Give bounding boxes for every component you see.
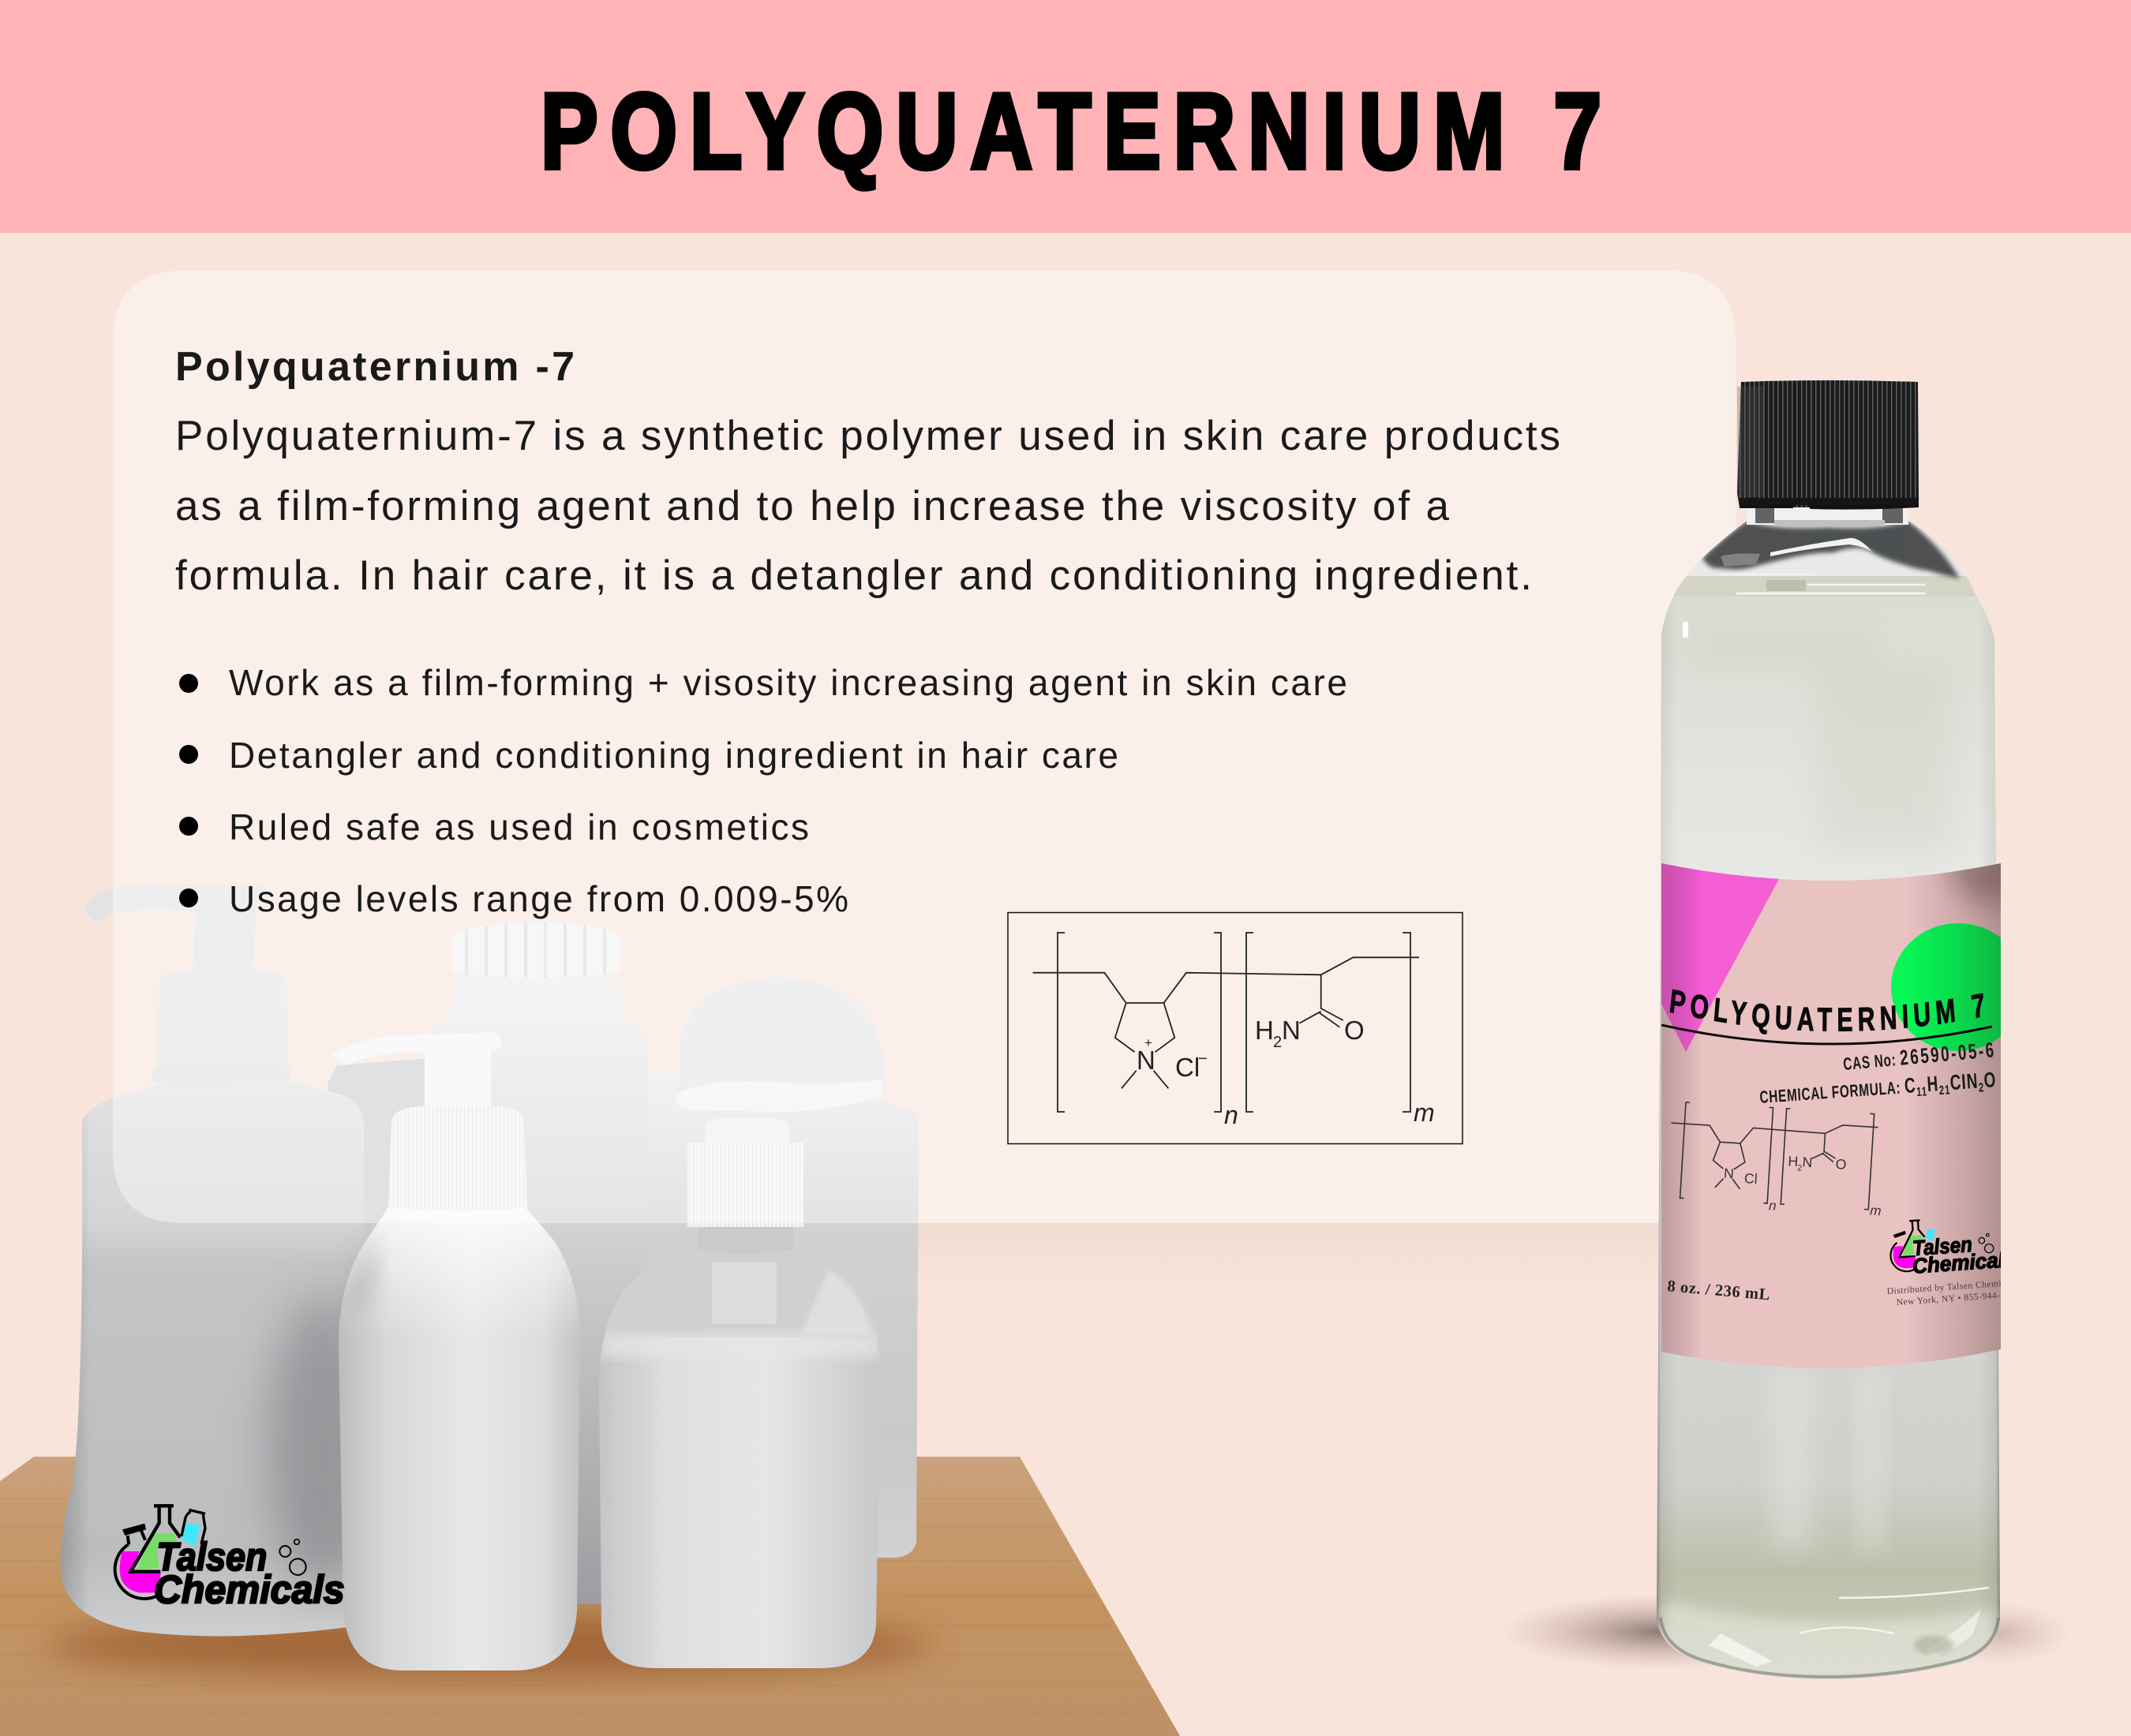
chemical structure diagram: O xyxy=(1344,1016,1365,1045)
floor shadow under product bottle xyxy=(1500,1594,2072,1670)
chemical structure diagram: + xyxy=(1144,1035,1152,1050)
label chemical formula: 2 xyxy=(1978,1079,1985,1094)
label chemical formula: 11 xyxy=(1916,1083,1928,1099)
label volume: 8 oz. / 236 mL xyxy=(1667,1278,1771,1304)
label chemical structure: n xyxy=(1769,1198,1777,1214)
label chemical formula: O xyxy=(1983,1068,1997,1092)
logo: Talsen Chemicals xyxy=(115,1506,345,1612)
label chemical formula: CHEMICAL FORMULA: C xyxy=(1759,1073,1917,1108)
product bottle xyxy=(1657,380,2001,1681)
label chemical structure: O xyxy=(1835,1156,1847,1173)
description paragraph: as a film-forming agent and to help increase the viscosity of a xyxy=(175,483,1450,529)
bottle shading and liquid detail xyxy=(1657,521,2001,1681)
translucent text panel xyxy=(113,271,1736,1223)
black ribbed cap xyxy=(1737,380,1919,510)
logo: Talsen Chemicals: Talsen xyxy=(156,1535,267,1579)
bullet list: Detangler and conditioning ingredient in hair care xyxy=(229,735,1118,776)
description heading: Polyquaternium -7 xyxy=(175,344,575,390)
label green circle xyxy=(1891,923,2001,1051)
label chemical structure: N xyxy=(1802,1154,1813,1170)
label chemical structure: m xyxy=(1870,1203,1882,1218)
label chemical structure: 2 xyxy=(1797,1163,1803,1173)
label CAS number: CAS No: 26590-05-6 xyxy=(1842,1038,1997,1075)
label chemical structure: Cl xyxy=(1743,1170,1758,1187)
chemical structure diagram: m xyxy=(1414,1098,1435,1127)
header banner xyxy=(0,0,2131,233)
center pump bottle xyxy=(332,1032,580,1671)
chemical structure diagram: n xyxy=(1224,1101,1238,1129)
bullet list: Ruled safe as used in cosmetics xyxy=(229,806,809,847)
label distributor text: Distributed by Talsen Chemicals xyxy=(1886,1278,2017,1296)
back bottle: left box xyxy=(328,1057,442,1420)
chemical structure diagram: Cl xyxy=(1175,1053,1200,1082)
description paragraph: Polyquaternium-7 is a synthetic polymer used in skin care products xyxy=(175,413,1560,459)
label chemical formula: CIN xyxy=(1949,1068,1979,1094)
label shading xyxy=(1661,860,2001,1389)
label distributor text: New York, NY • 855-944-2 xyxy=(1896,1290,2006,1308)
chemical structure diagram xyxy=(1008,912,1462,1144)
label distributor text xyxy=(1886,1280,2001,1305)
back bottle: right box xyxy=(648,1068,919,1558)
label magenta triangle xyxy=(1661,860,1780,1052)
chemical structure diagram: − xyxy=(1198,1050,1208,1068)
chemical structure diagram: N xyxy=(1137,1046,1155,1075)
logo: Talsen Chemicals: Chemicals xyxy=(154,1568,345,1612)
wooden table xyxy=(0,1457,1180,1736)
back bottle: tall powder bottle xyxy=(425,922,648,1604)
right pump bottle with dome cap xyxy=(596,978,886,1668)
label logo: Chemicals xyxy=(1912,1248,2016,1278)
label rule xyxy=(1661,1025,1992,1044)
bullet list xyxy=(179,662,1347,919)
label chemical formula: 21 xyxy=(1938,1082,1951,1098)
description paragraph: formula. In hair care, it is a detangler and conditioning ingredient. xyxy=(175,552,1532,599)
label logo xyxy=(1889,1219,2001,1274)
left pump bottle xyxy=(61,884,379,1636)
product label xyxy=(1661,863,2001,1368)
label title: POLYQUATERNIUM 7 xyxy=(1670,990,1983,1034)
bottle neck xyxy=(1747,507,1908,526)
label chemical structure: N xyxy=(1724,1165,1734,1181)
chemical structure diagram: H xyxy=(1255,1016,1274,1045)
bottle glass body xyxy=(1657,521,2000,1679)
title: POLYQUATERNIUM 7 xyxy=(541,73,1601,192)
bullet list: Usage levels range from 0.009-5% xyxy=(229,878,848,919)
label chemical formula: H xyxy=(1927,1072,1939,1096)
label chemical structure: H xyxy=(1788,1153,1799,1169)
description paragraph xyxy=(175,413,1560,599)
chemical structure diagram: N xyxy=(1282,1016,1301,1045)
label logo: Talsen xyxy=(1912,1233,1973,1260)
chemical structure diagram: 2 xyxy=(1273,1034,1282,1051)
bullet list: Work as a film-forming + visosity increasing agent in skin care xyxy=(229,662,1347,703)
label chemical structure xyxy=(1666,1102,1887,1220)
product photo: white cosmetic bottles xyxy=(47,884,931,1677)
